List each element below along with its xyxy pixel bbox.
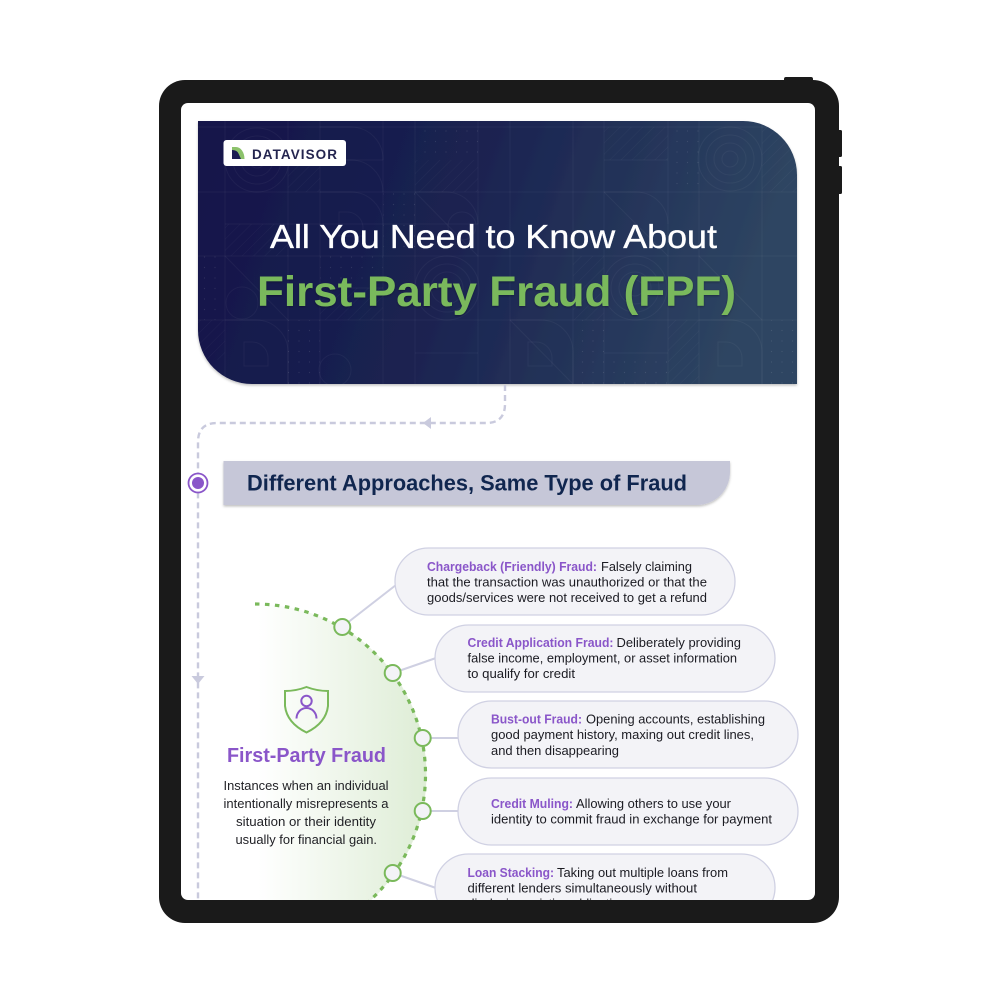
purple timeline marker — [188, 474, 208, 492]
card: loan stacking: Loan Stacking: — [468, 866, 554, 880]
card: chargeback fraud: that the transaction was unauthorized or that the — [427, 576, 707, 590]
connector lines — [342, 585, 459, 888]
tablet device frame — [159, 77, 842, 923]
title line 2: First-Party Fraud (FPF) — [257, 268, 736, 316]
card: credit application fraud: to qualify for credit — [468, 667, 576, 681]
card: bust-out fraud: and then disappearing — [491, 744, 619, 758]
logo mark — [232, 147, 244, 159]
circle heading: First-Party Fraud — [227, 745, 386, 767]
card: credit application fraud: false income, employment, or asset information — [468, 652, 737, 666]
card: chargeback fraud: goods/services were not received to get a refund — [427, 591, 707, 605]
card: credit application fraud — [435, 625, 775, 692]
section heading: Different Approaches, Same Type of Fraud — [247, 470, 687, 496]
card: loan stacking — [434, 853, 776, 900]
card: bust-out fraud: Opening accounts, establishing — [586, 712, 765, 726]
logo wordmark: DATAVISOR — [252, 147, 337, 162]
icon: shield with person — [285, 687, 328, 732]
section heading — [224, 461, 730, 505]
card: bust-out fraud — [458, 701, 798, 768]
card: loan stacking: different lenders simultaneously without — [468, 882, 698, 896]
dashed flow line — [198, 385, 505, 900]
green half circle: First-Party Fraud — [224, 602, 428, 900]
screen content — [188, 121, 798, 945]
card: credit application fraud: Credit Application Fraud: — [468, 636, 614, 650]
card: credit application fraud: Deliberately providing — [616, 636, 741, 650]
arrow: down on flow line — [192, 676, 204, 682]
arrow: left on flow line — [424, 417, 431, 429]
card: credit muling — [458, 778, 798, 845]
circle description: situation or their identity — [236, 815, 377, 829]
card: loan stacking: disclosing existing obligations — [468, 897, 632, 911]
card: credit muling: Allowing others to use your — [576, 797, 731, 811]
logo badge — [224, 140, 346, 166]
circle description: intentionally misrepresents a — [224, 797, 388, 811]
title line 1: All You Need to Know About — [270, 218, 717, 255]
circle description — [224, 779, 388, 847]
connector nodes — [334, 619, 431, 881]
card: chargeback fraud: Falsely claiming — [601, 560, 692, 574]
circle description: Instances when an individual — [224, 779, 388, 793]
card: bust-out fraud: good payment history, maxing out credit lines, — [491, 728, 754, 742]
card: chargeback fraud: Chargeback (Friendly) Fraud: — [427, 560, 597, 574]
card: chargeback fraud — [395, 548, 735, 615]
circle description: usually for financial gain. — [236, 833, 377, 847]
card: credit muling: Credit Muling: — [491, 797, 573, 811]
header banner — [198, 121, 797, 386]
card: bust-out fraud: Bust-out Fraud: — [491, 712, 582, 726]
card: credit muling: identity to commit fraud in exchange for payment — [491, 812, 773, 826]
card: loan stacking: Taking out multiple loans from — [557, 866, 728, 880]
